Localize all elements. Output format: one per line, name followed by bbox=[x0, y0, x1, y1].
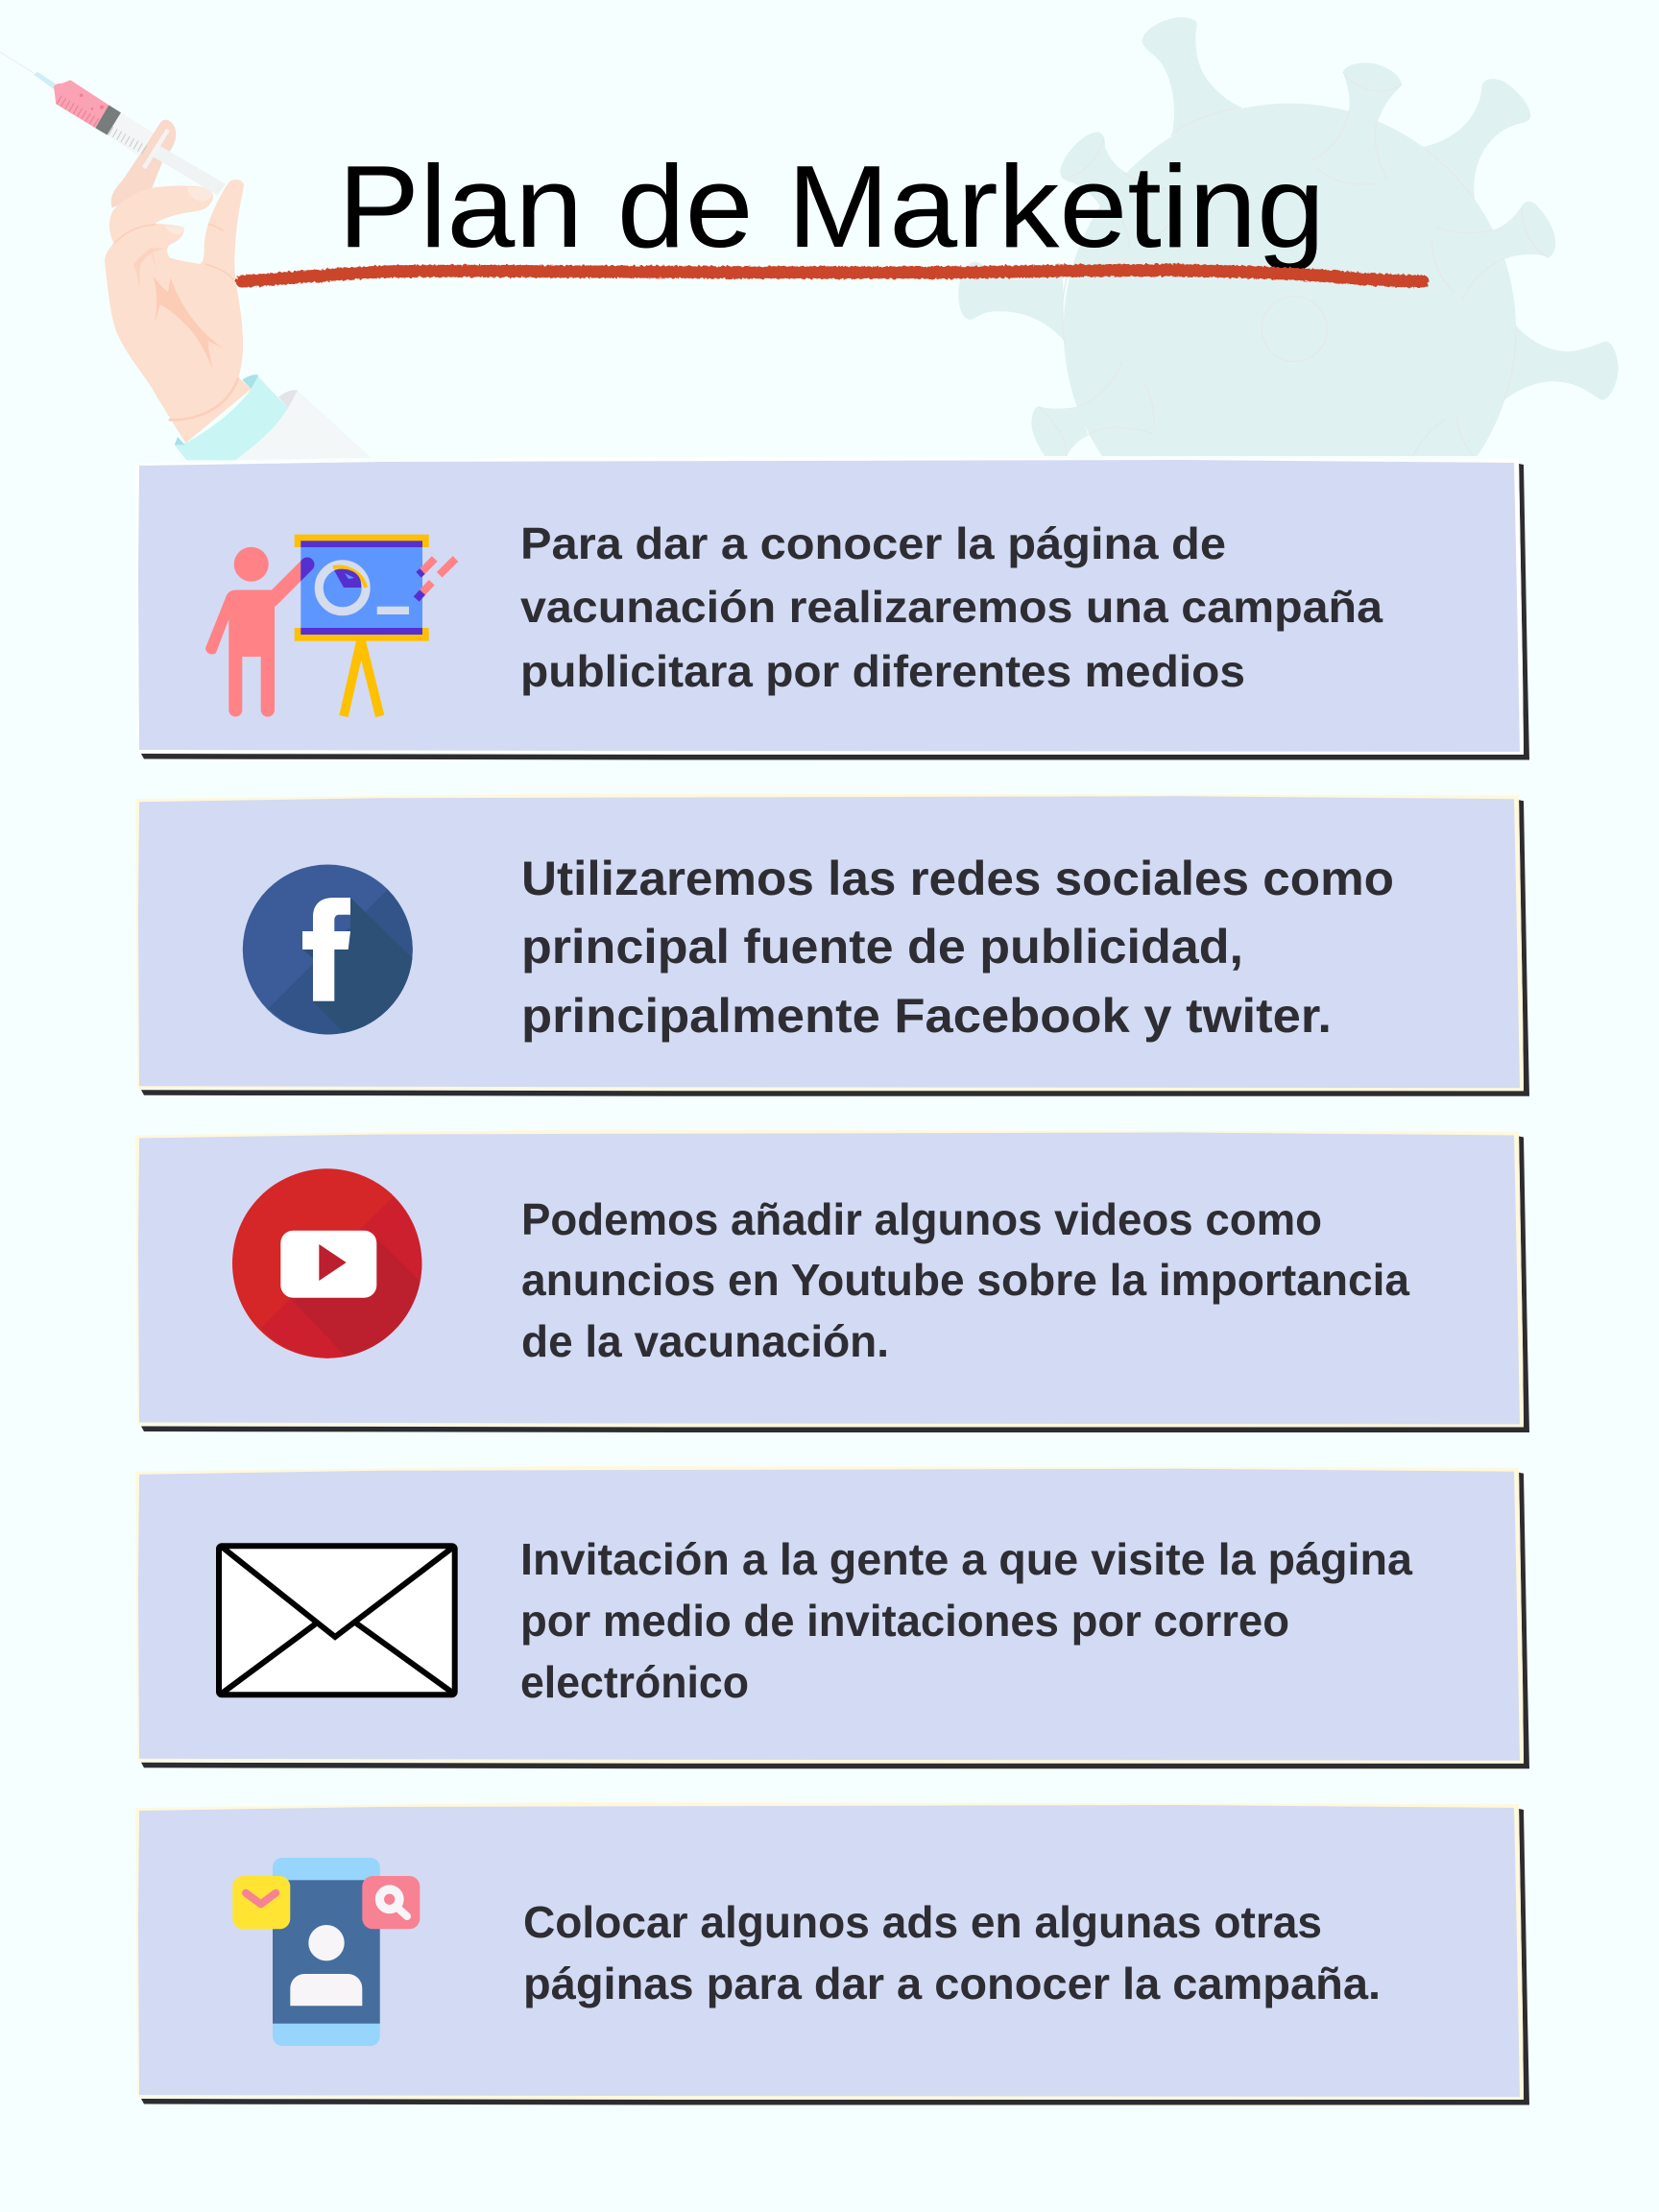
text block bbox=[520, 1534, 1412, 1707]
text block bbox=[523, 1897, 1381, 2008]
text block: Para dar a conocer la página de bbox=[520, 518, 1226, 568]
panel: campaign bbox=[135, 457, 1529, 760]
text block: Podemos añadir algunos videos como bbox=[521, 1194, 1322, 1244]
syringe bbox=[0, 52, 34, 73]
cuff bbox=[175, 376, 288, 460]
text block: páginas para dar a conocer la campaña. bbox=[523, 1959, 1381, 2008]
text block: principal fuente de publicidad, bbox=[521, 920, 1243, 974]
text block: electrónico bbox=[520, 1657, 749, 1707]
panel: web ads bbox=[135, 1802, 1529, 2104]
text block: de la vacunación. bbox=[521, 1316, 889, 1366]
text block: principalmente Facebook y twiter. bbox=[521, 989, 1332, 1043]
icon: facebook bbox=[243, 864, 413, 1035]
text block: Utilizaremos las redes sociales como bbox=[521, 852, 1394, 905]
text block: Invitación a la gente a que visite la página bbox=[520, 1534, 1412, 1584]
sleeve bbox=[235, 391, 372, 460]
text block bbox=[520, 518, 1382, 696]
text block: Colocar algunos ads en algunas otras bbox=[523, 1897, 1322, 1947]
nails bbox=[187, 187, 212, 201]
hand veins bbox=[153, 276, 227, 370]
icon: presenter with board bbox=[205, 535, 455, 717]
panel: email invitations bbox=[135, 1466, 1529, 1768]
panel: youtube videos bbox=[135, 1129, 1529, 1432]
text block: por medio de invitaciones por correo bbox=[520, 1596, 1289, 1646]
text block: vacunación realizaremos una campaña bbox=[520, 582, 1382, 632]
text block: anuncios en Youtube sobre la importancia bbox=[521, 1255, 1409, 1305]
icon: youtube bbox=[232, 1168, 421, 1358]
illustration: hand holding syringe bbox=[0, 52, 372, 460]
text block: publicitara por diferentes medios bbox=[520, 646, 1245, 696]
hand bbox=[105, 180, 252, 444]
illustration: virus background bbox=[958, 17, 1619, 456]
title underline brush stroke bbox=[242, 270, 1423, 281]
back finger bbox=[111, 120, 176, 208]
icon: phone with profile bbox=[232, 1858, 420, 2046]
title: Plan de Marketing bbox=[338, 141, 1325, 272]
icon: envelope bbox=[219, 1546, 455, 1695]
text block bbox=[521, 1194, 1409, 1366]
panel: social networks bbox=[135, 793, 1529, 1096]
text block bbox=[521, 852, 1394, 1043]
